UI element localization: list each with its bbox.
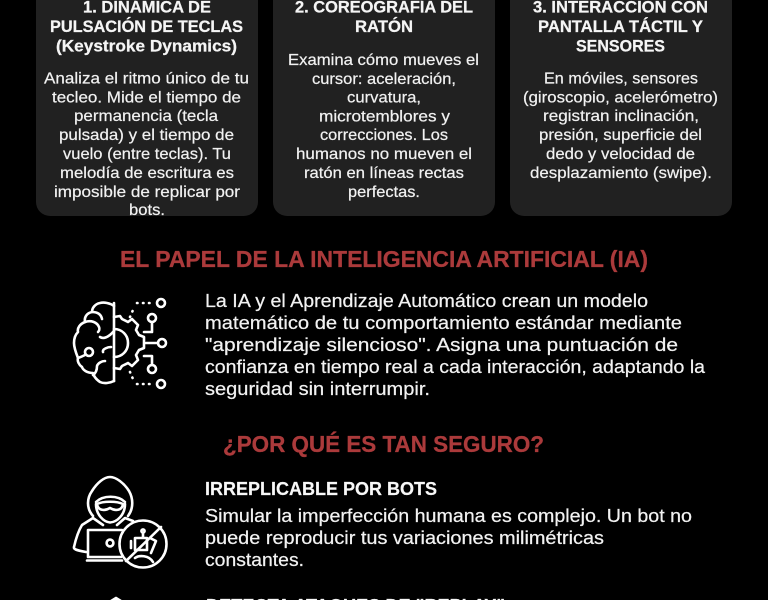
panel: mouse choreography <box>273 0 495 216</box>
heading: why so secure: ¿POR QUÉ ES TAN SEGURO? <box>223 430 544 457</box>
benefit text: Simular la imperfección humana es complejo. Un bot no <box>205 506 692 526</box>
card body: mouse choreography: microtemblores y <box>319 108 450 126</box>
icon: hooded hacker with crossed-out bot <box>74 477 166 568</box>
text block: AI description: "aprendizaje silencioso". Asigna una puntuación de <box>205 335 678 355</box>
card title: keystroke dynamics <box>50 0 243 56</box>
card body: keystroke dynamics: permanencia (tecla <box>74 108 218 125</box>
card body: touch screen and sensors: desplazamiento (swipe). <box>530 165 712 182</box>
card body: touch screen and sensors <box>523 70 718 182</box>
card title: touch screen and sensors: PANTALLA TÁCTIL Y <box>538 17 703 36</box>
card title: keystroke dynamics: (Keystroke Dynamics) <box>56 38 237 56</box>
panel: touch screen and sensors <box>510 0 732 216</box>
card body: touch screen and sensors: dedo y velocidad de <box>546 146 695 163</box>
text block: AI description: matemático de tu comportamiento estándar mediante <box>205 313 682 333</box>
icon: brain with gear and circuit <box>74 299 166 388</box>
benefit text: constantes. <box>205 550 304 570</box>
card body: mouse choreography: correcciones. Los <box>320 127 448 144</box>
card body: mouse choreography <box>288 52 479 201</box>
benefit title: IRREPLICABLE POR BOTS <box>205 479 437 499</box>
card body: keystroke dynamics: Analiza el ritmo único de tu <box>44 70 249 88</box>
card body: keystroke dynamics: imposible de replicar por <box>54 184 241 201</box>
card body: mouse choreography: cursor: aceleración, <box>312 71 456 88</box>
text block: AI description <box>205 291 706 399</box>
card body: mouse choreography: curvatura, <box>347 90 421 106</box>
card body: keystroke dynamics: tecleo. Mide el tiempo de <box>52 90 241 106</box>
card title: mouse choreography: RATÓN <box>355 17 413 36</box>
text block: AI description: seguridad sin interrumpir. <box>205 379 430 399</box>
card body: keystroke dynamics: bots. <box>129 202 165 219</box>
card title: keystroke dynamics: PULSACIÓN DE TECLAS <box>50 17 243 36</box>
icon: shield (cropped) <box>103 598 129 600</box>
card body: mouse choreography: perfectas. <box>348 184 420 201</box>
card body: mouse choreography: humanos no mueven el <box>296 146 472 163</box>
card body: mouse choreography: Examina cómo mueves el <box>288 52 479 69</box>
panel: keystroke dynamics <box>36 0 258 219</box>
card body: keystroke dynamics: melodía de escritura es <box>60 165 234 182</box>
card body: keystroke dynamics: vuelo (entre teclas). Tu <box>63 146 231 163</box>
card title: touch screen and sensors: SENSORES <box>576 38 665 56</box>
text block: AI description: confianza en tiempo real a cada interacción, adaptando la <box>205 357 706 377</box>
card body: touch screen and sensors: (giroscopio, acelerómetro) <box>523 90 718 106</box>
benefit text: puede reproducir tus variaciones milimétricas <box>205 528 604 548</box>
card body: touch screen and sensors: presión, superficie del <box>539 127 702 144</box>
card body: touch screen and sensors: En móviles, sensores <box>544 70 698 88</box>
card title: touch screen and sensors <box>533 0 708 56</box>
card title: mouse choreography <box>295 0 473 36</box>
card body: keystroke dynamics <box>44 70 249 219</box>
card body: touch screen and sensors: registran inclinación, <box>543 108 699 125</box>
benefit text <box>205 506 692 570</box>
card body: mouse choreography: ratón en líneas rectas <box>304 165 464 182</box>
benefit: irreplicable by bots <box>205 479 692 570</box>
text block: AI description: La IA y el Aprendizaje Automático crean un modelo <box>205 291 648 311</box>
card body: keystroke dynamics: pulsada) y el tiempo de <box>59 127 234 144</box>
heading: artificial intelligence: EL PAPEL DE LA INTELIGENCIA ARTIFICIAL (IA) <box>120 246 648 272</box>
